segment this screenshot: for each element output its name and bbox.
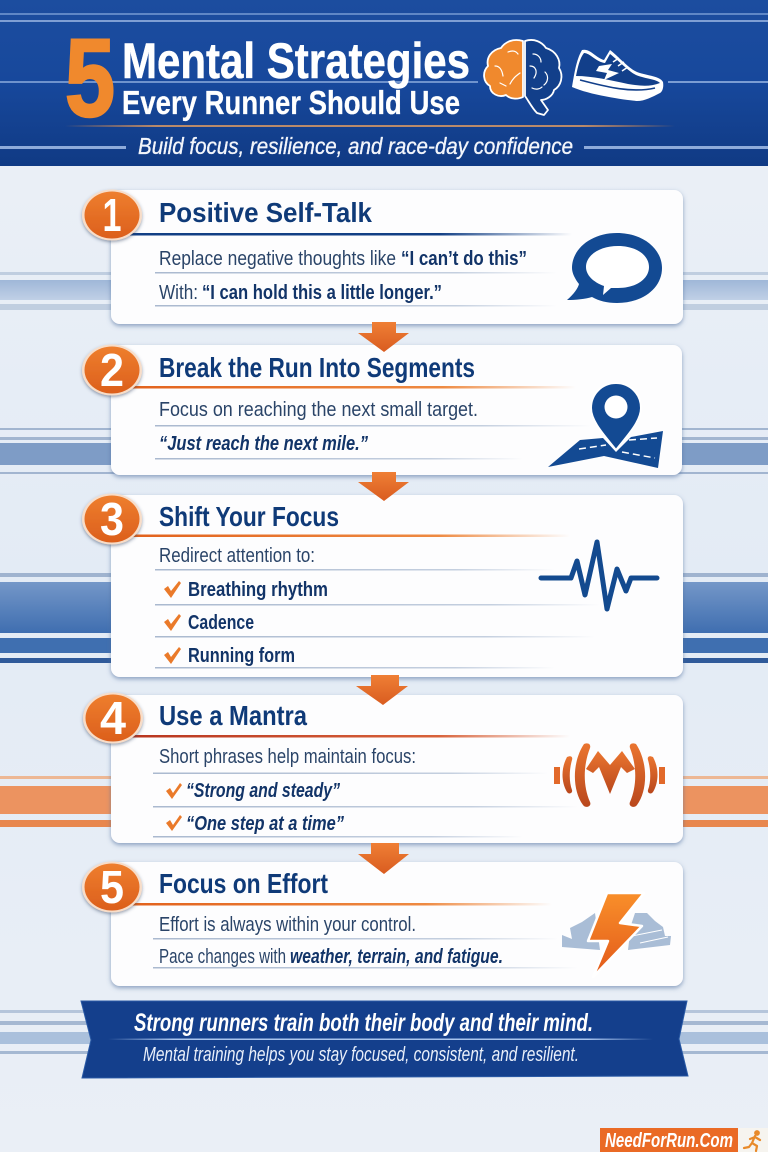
title xyxy=(65,17,470,140)
heading: shift your focus: Shift Your Focus xyxy=(159,501,339,532)
list item: breathing rhythm: Breathing rhythm xyxy=(188,579,328,601)
arrow: step 2 to 3 xyxy=(358,472,409,501)
arrow: step 4 to 5 xyxy=(358,843,409,874)
list item: running form: Running form xyxy=(188,645,295,667)
badge: 5 xyxy=(82,861,142,913)
list item: one step at a time: “One step at a time” xyxy=(186,813,344,835)
text: next mile quote: “Just reach the next mile.” xyxy=(159,433,368,455)
text: with: “I can hold this a little longer.” xyxy=(202,282,442,304)
icon: runner xyxy=(744,1131,760,1151)
heading: break the run: Break the Run Into Segments xyxy=(159,352,475,383)
heading: focus on effort: Focus on Effort xyxy=(159,868,328,899)
panel: 5 focus on effort xyxy=(111,862,683,986)
panel: 1 positive self-talk xyxy=(111,190,683,324)
list item: cadence xyxy=(164,612,254,634)
ribbon subtext: Mental training helps you stay focused, consistent, and resilient. xyxy=(143,1044,579,1066)
arrow: step 1 to 2 xyxy=(358,322,409,352)
icon: speech bubble xyxy=(567,233,662,303)
panel: 2 break the run into segments xyxy=(111,345,682,475)
header banner xyxy=(0,0,768,166)
subtitle: Build focus, resilience, and race-day confidence xyxy=(138,133,573,159)
badge: 4: 4 xyxy=(100,692,126,744)
text: replace negative thoughts: “I can’t do this” xyxy=(401,248,527,270)
panel: 4 use a mantra xyxy=(111,695,683,843)
title: Every Runner Should Use xyxy=(122,84,460,121)
heading: use a mantra: Use a Mantra xyxy=(159,700,307,731)
text: redirect attention: Redirect attention to: xyxy=(159,545,315,567)
text: effort in control: Effort is always within your control. xyxy=(159,914,416,936)
background stripes xyxy=(0,272,768,1054)
icon: map pin xyxy=(548,383,663,468)
icon: mantra sound wave xyxy=(554,743,665,807)
icon: lightning bolt xyxy=(562,893,671,977)
badge: 2: 2 xyxy=(100,344,124,396)
text: pace changes: weather, terrain, and fatigue. xyxy=(290,946,503,968)
panel: 3 shift your focus xyxy=(111,495,683,677)
text: pace changes: Pace changes with xyxy=(159,946,286,968)
list item: strong and steady: “Strong and steady” xyxy=(186,780,340,802)
badge: 2 xyxy=(82,344,142,396)
text: short phrases: Short phrases help maintain focus: xyxy=(159,746,416,768)
icon: brain xyxy=(484,40,561,115)
arrow: step 3 to 4 xyxy=(356,675,408,705)
badge: 3 xyxy=(82,493,142,545)
text: pace changes xyxy=(159,946,503,968)
list item: cadence: Cadence xyxy=(188,612,254,634)
heading: positive self-talk: Positive Self-Talk xyxy=(159,197,372,228)
badge: 1 xyxy=(82,189,142,241)
badge: 5: 5 xyxy=(100,861,124,913)
icon: running shoe xyxy=(572,50,663,101)
text: replace negative thoughts: Replace negative thoughts like xyxy=(159,248,396,270)
title: 5 xyxy=(65,17,115,140)
icon: pulse line xyxy=(541,542,657,609)
text: focus on reaching: Focus on reaching the next small target. xyxy=(159,399,478,421)
closing ribbon xyxy=(81,1001,688,1078)
title: Mental Strategies xyxy=(122,33,470,89)
text: with: With: xyxy=(159,282,198,304)
ribbon headline: Strong runners train both their body and their mind. xyxy=(134,1009,593,1037)
list item: running form xyxy=(164,645,295,667)
badge: 1: 1 xyxy=(102,189,122,241)
badge: 4 xyxy=(83,692,143,744)
badge: 3: 3 xyxy=(100,493,124,545)
